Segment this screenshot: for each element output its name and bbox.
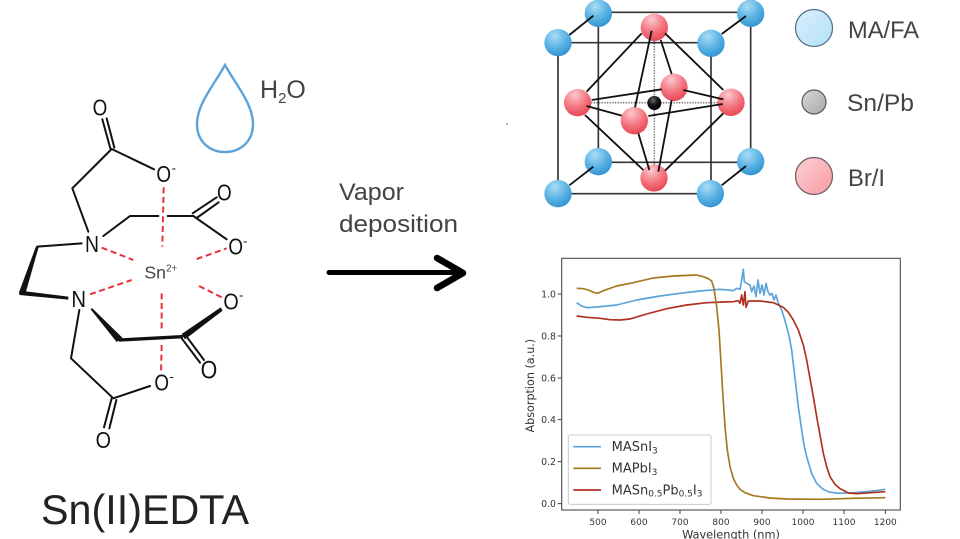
x tick labels: 600 (630, 518, 648, 528)
charge labels: - (239, 287, 243, 302)
atom labels: O (223, 289, 239, 315)
y tick labels (541, 289, 556, 510)
y tick labels: 0.8 (541, 331, 556, 342)
icon: water drop (197, 65, 253, 152)
atom labels: O (154, 370, 169, 396)
metal centre label: 2+ (166, 263, 177, 274)
curve: MASn0.5Pb0.5I3 (577, 292, 885, 494)
legend: Sn/Pb: Sn/Pb (847, 90, 914, 117)
atom labels: O (93, 94, 107, 120)
atom labels: O (96, 427, 111, 453)
crystal structure (544, 0, 764, 207)
octahedron bonds (585, 31, 723, 172)
x tick labels: 800 (712, 518, 730, 528)
red atoms (564, 14, 745, 192)
chart legend: I (693, 483, 697, 498)
wedge bonds (19, 246, 223, 342)
water label: O (286, 76, 306, 104)
coordination bonds (90, 187, 227, 373)
atom labels: N (71, 286, 86, 312)
y tick labels: 0.4 (541, 415, 556, 426)
molecule title: Sn(II)EDTA (41, 486, 249, 533)
metal centre label: Sn (144, 262, 166, 282)
arrow: vapor deposition (329, 258, 463, 288)
y tick labels: 0.0 (541, 499, 556, 510)
molecule: Sn(II)EDTA structure (19, 94, 247, 453)
curve: MASnI3 (577, 269, 885, 493)
chart legend: 0.5 (648, 490, 663, 500)
atom labels: O (228, 233, 243, 259)
atom labels: N (85, 231, 99, 257)
absorption chart: Absorption (a.u.) (524, 339, 537, 432)
x tick labels: 1200 (874, 518, 897, 528)
x tick labels: 1100 (833, 518, 856, 528)
central black atom (647, 96, 661, 110)
y tick labels: 0.2 (541, 457, 556, 468)
atom labels: O (217, 179, 232, 205)
absorption chart (524, 258, 900, 539)
atom labels: O (156, 161, 171, 187)
y tick labels: 0.6 (541, 373, 556, 384)
chart legend: MASnI (612, 440, 652, 455)
x tick labels: 1000 (792, 518, 815, 528)
x tick labels: 700 (671, 518, 689, 528)
chart legend: MASn (612, 483, 648, 498)
charge labels: - (172, 161, 176, 176)
process label: deposition (339, 211, 458, 238)
legend: Sn/Pb (802, 90, 914, 117)
front blue atoms (544, 29, 725, 207)
charge labels: - (169, 369, 174, 384)
curve: MAPbI3 (577, 275, 885, 499)
chart legend: MAPbI (612, 462, 652, 477)
process label: Vapor (339, 179, 404, 206)
charge labels (169, 161, 247, 384)
chart legend: 3 (652, 468, 657, 478)
chart legend: 3 (652, 446, 658, 456)
water label: 2 (278, 90, 286, 107)
atom legend (796, 10, 919, 194)
legend: Br/I (796, 158, 885, 194)
chart legend: 3 (697, 490, 702, 500)
chart legend (568, 435, 711, 504)
legend: MA/FA (796, 10, 919, 46)
legend: Br/I: Br/I (848, 165, 885, 192)
chart legend: 0.5 (679, 490, 693, 500)
axis ticks (558, 294, 885, 514)
black bonds (37, 118, 227, 428)
water label: H (260, 76, 278, 104)
plot frame (562, 258, 900, 510)
x tick labels (589, 518, 897, 528)
y tick labels: 1.0 (541, 289, 556, 300)
rear blue atoms (585, 0, 764, 175)
atom labels: O (201, 357, 217, 385)
legend: MA/FA: MA/FA (848, 17, 919, 44)
blue atom bond stubs (569, 16, 746, 185)
x tick labels: 500 (589, 518, 607, 528)
front cube edges (558, 43, 711, 194)
atom labels (71, 94, 243, 453)
rear cube edges (598, 12, 751, 162)
chart legend: Pb (663, 483, 679, 498)
charge labels: - (243, 234, 247, 249)
octahedron dotted axes (578, 27, 731, 178)
x tick labels: 900 (753, 518, 771, 528)
